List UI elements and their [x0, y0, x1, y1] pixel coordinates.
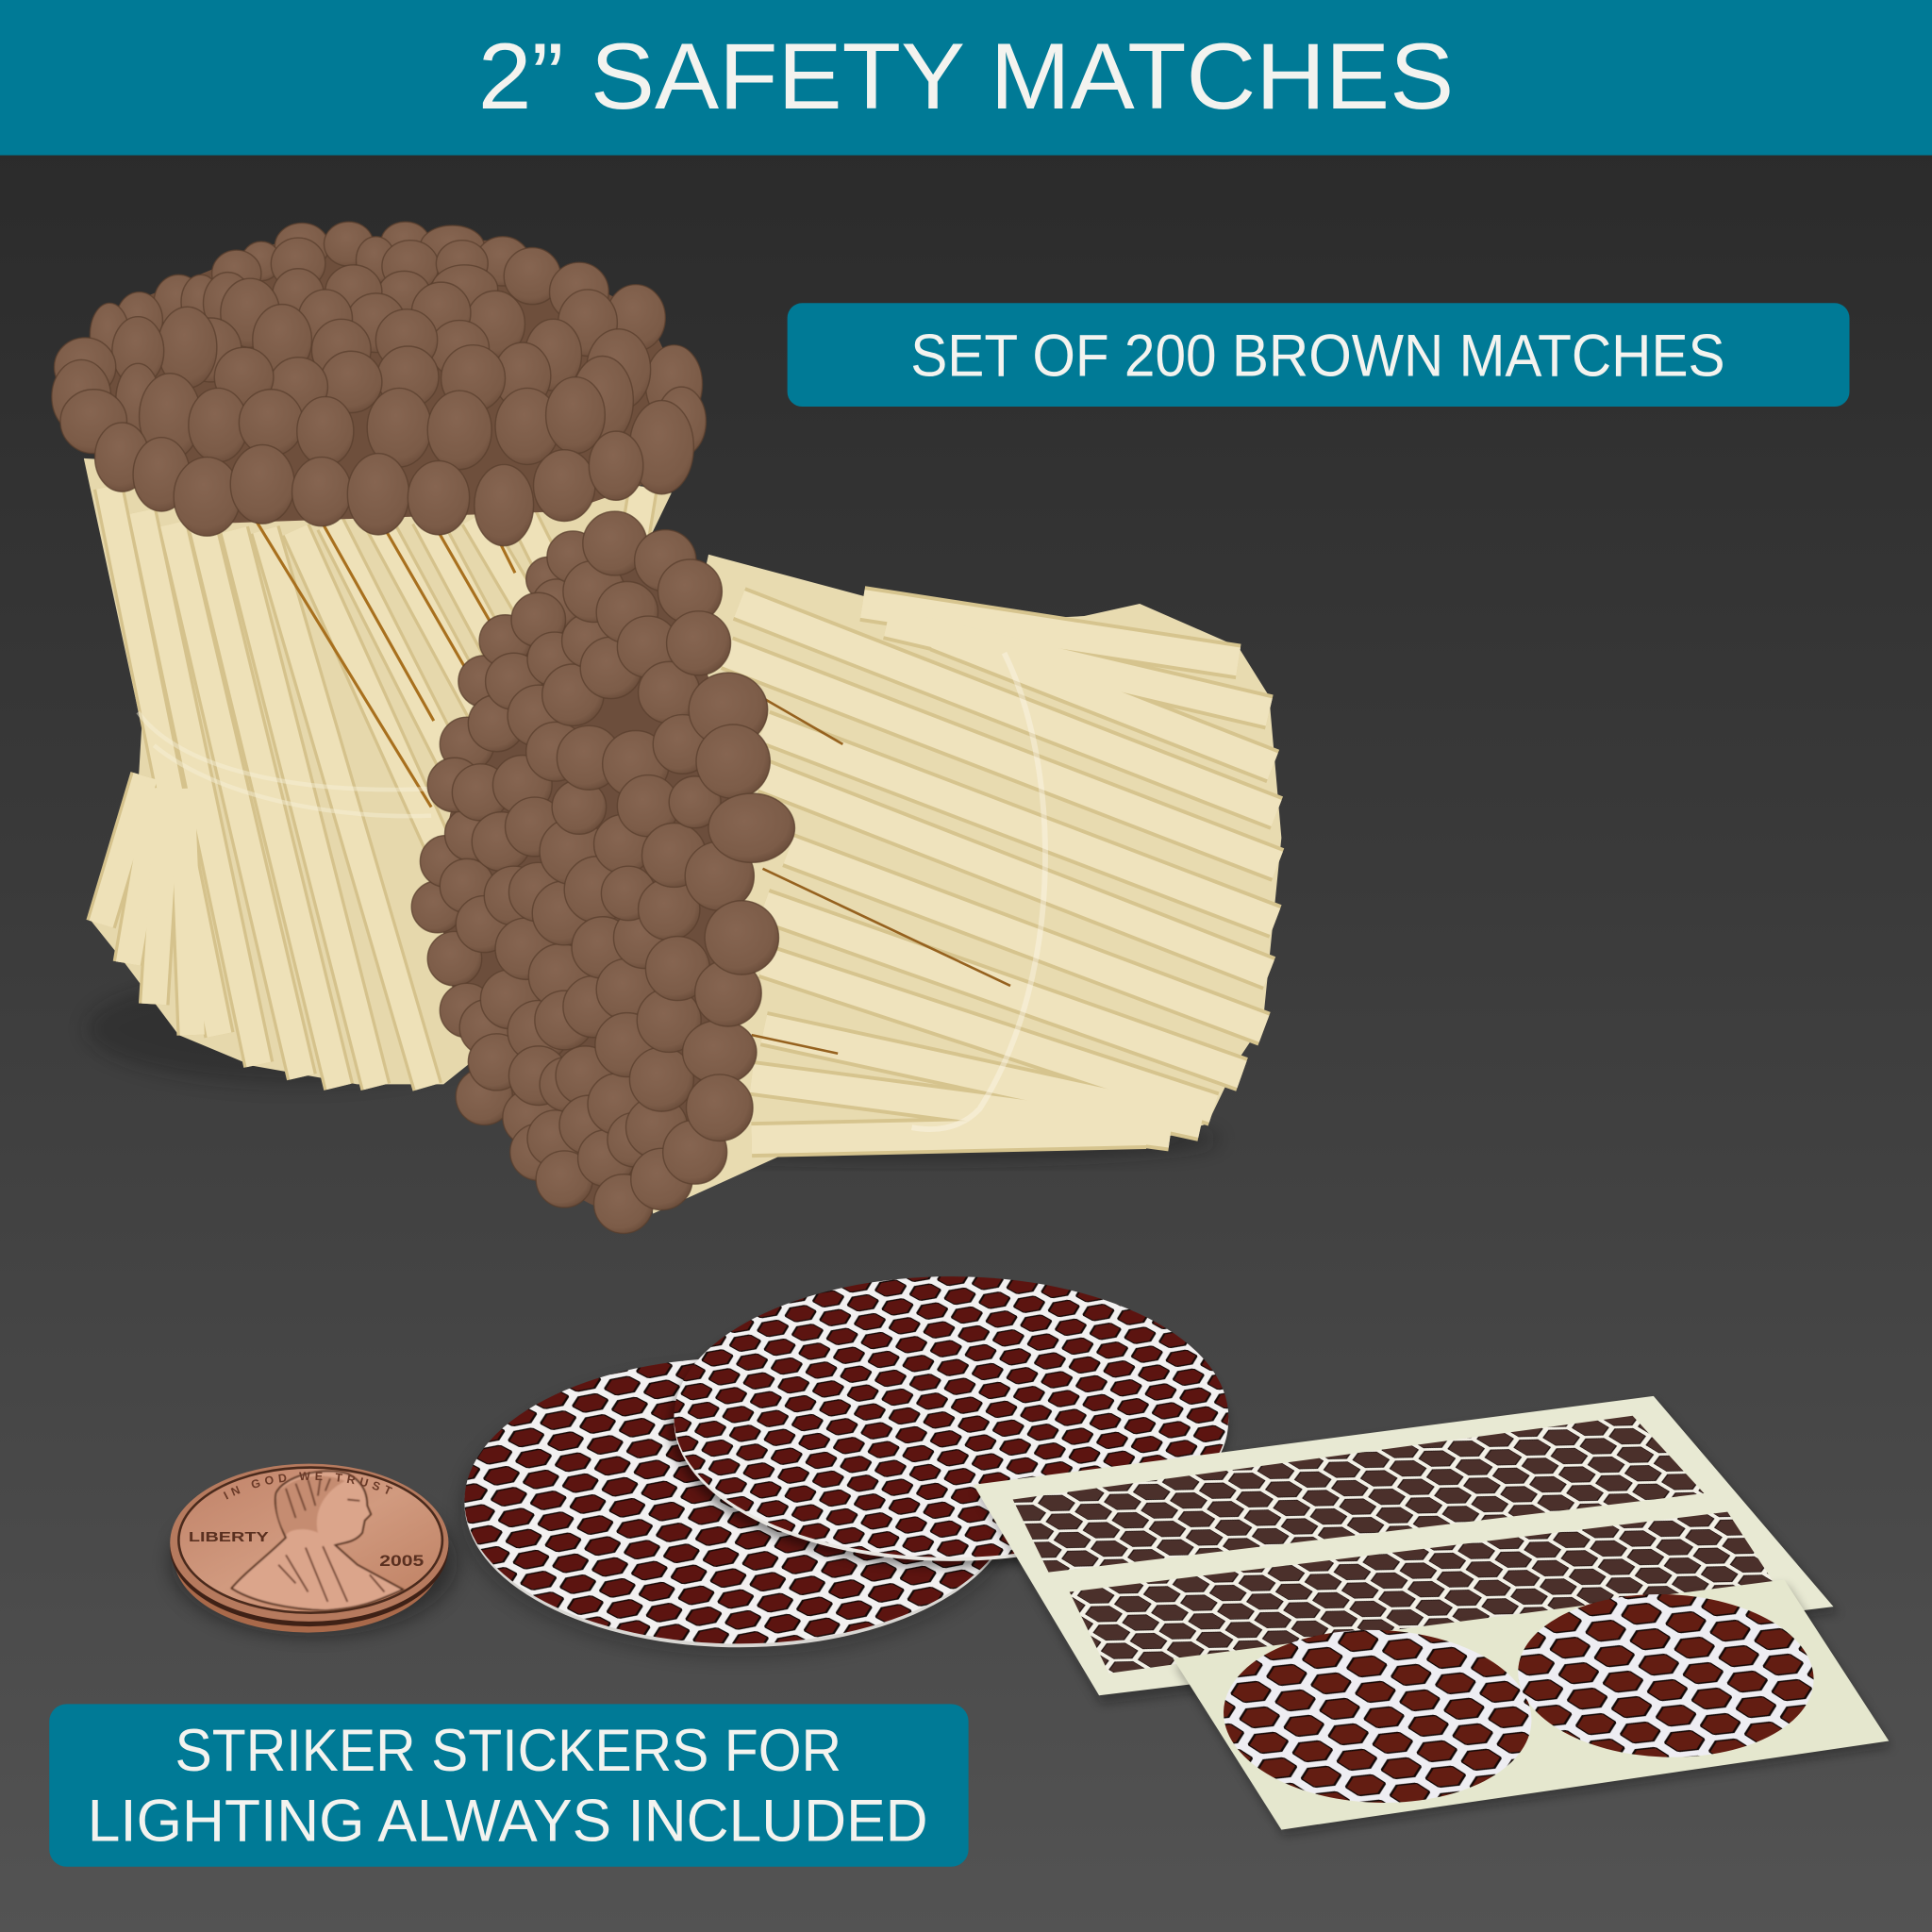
Lincoln portrait: [232, 1471, 403, 1610]
header banner: [0, 0, 1932, 156]
penny lettering: IN GOD WE TRUST: [223, 1472, 392, 1500]
penny for scale: 2005: [379, 1552, 424, 1570]
callout: striker stickers: LIGHTING ALWAYS INCLUDED: [88, 1788, 928, 1854]
upright match bundle: [52, 222, 706, 1087]
round sticker right: [1515, 1590, 1817, 1762]
striker strip top: [1013, 1416, 1704, 1573]
callout: striker stickers: [49, 1704, 969, 1867]
lying match bundle: [411, 511, 1281, 1233]
striker strip sheet: [974, 1396, 1839, 1704]
match heads, upright bundle: [52, 222, 706, 546]
round sticker left: [1221, 1624, 1535, 1807]
match heads, lying bundle: [411, 511, 794, 1233]
penny for scale: [166, 1464, 462, 1643]
title: 2” SAFETY MATCHES: [478, 25, 1454, 129]
penny for scale: LIBERTY: [189, 1530, 269, 1545]
striker disc, lower: [460, 1357, 1018, 1656]
rubber band: [912, 653, 1045, 1129]
striker strip bottom: [1070, 1512, 1774, 1674]
striker disc, upper: [671, 1276, 1228, 1567]
callout: set of 200 brown matches: [788, 303, 1849, 407]
callout: striker stickers: STRIKER STICKERS FOR: [175, 1718, 841, 1784]
callout: set of 200 brown matches: SET OF 200 BROWN MATCHES: [910, 323, 1725, 389]
rubber band: [138, 712, 434, 816]
round sticker sheet: [1173, 1579, 1891, 1836]
